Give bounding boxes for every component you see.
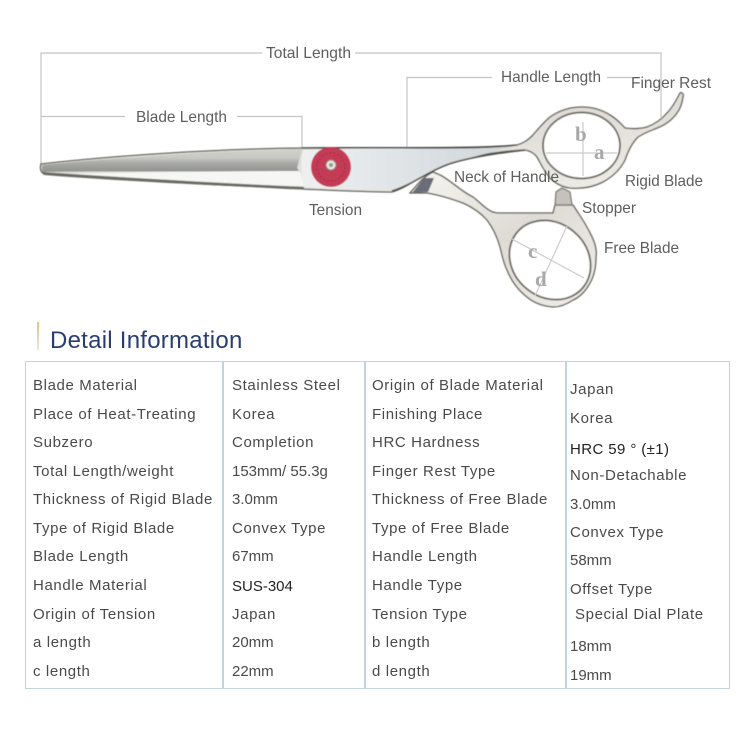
column: attribute names 1: Total Length/weight <box>33 462 174 480</box>
column: attribute values 1: 3.0mm <box>232 491 278 508</box>
column: attribute names 2: Origin of Blade Material <box>372 377 544 394</box>
label: finger rest: Finger Rest <box>631 75 712 92</box>
scissors <box>40 93 683 316</box>
column: attribute values 2: 58mm <box>570 552 612 569</box>
column: attribute names 1: Subzero <box>33 434 93 451</box>
column: attribute values 1: Korea <box>232 406 275 422</box>
label: stopper: Stopper <box>582 200 637 217</box>
column: attribute names 1: Thickness of Rigid Blade <box>33 491 213 508</box>
column: attribute values 2 <box>570 381 704 684</box>
column: attribute values 1: Japan <box>232 606 276 622</box>
column: attribute values 2: Offset Type <box>570 581 653 598</box>
ring measurement lines <box>512 122 617 296</box>
label: blade length: Blade Length <box>136 109 227 126</box>
column: attribute names 2 <box>372 377 548 680</box>
column: attribute names 1: Place of Heat-Treating <box>33 406 196 422</box>
column: attribute names 1: Handle Material <box>33 577 147 594</box>
heading: Detail Information: Detail Information <box>50 327 243 354</box>
ring dimension letters: c <box>528 239 537 263</box>
column: attribute values 1 <box>232 377 341 680</box>
column: attribute names 1: c length <box>33 663 90 680</box>
column: attribute names 2: Thickness of Free Blade <box>372 491 548 508</box>
label: total length: Total Length <box>266 45 351 62</box>
column: attribute values 1: SUS-304 <box>232 578 293 595</box>
column: attribute values 1: Convex Type <box>232 520 326 536</box>
column: attribute values 2: 19mm <box>570 667 612 684</box>
column: attribute names 1: Origin of Tension <box>33 606 156 622</box>
spec table frame <box>25 361 730 689</box>
column: attribute values 2: 18mm <box>570 638 612 655</box>
blade grind <box>42 149 302 172</box>
column: attribute values 2: 3.0mm <box>570 496 616 513</box>
column: attribute values 2: Special Dial Plate <box>575 606 704 623</box>
column: attribute names 1: Blade Material <box>33 377 138 394</box>
tension dial <box>311 147 351 187</box>
label: free blade: Free Blade <box>604 240 679 257</box>
ring dimension letters: d <box>535 267 547 291</box>
rigid blade and handle <box>40 93 683 192</box>
column: attribute values 2: Non-Detachable <box>570 467 687 484</box>
column: attribute names 1: Blade Length <box>33 548 129 565</box>
column: attribute names 2: Handle Type <box>372 577 463 594</box>
column: attribute values 1: 20mm <box>232 634 274 651</box>
column: attribute names 1: Type of Rigid Blade <box>33 520 175 536</box>
column: attribute values 1: Stainless Steel <box>232 377 341 394</box>
column: attribute values 1: 153mm/ 55.3g <box>232 462 328 480</box>
label: handle length: Handle Length <box>501 69 601 86</box>
column: attribute names 2: Handle Length <box>372 548 478 565</box>
stopper <box>555 188 572 205</box>
ring dimension letters: b <box>575 122 587 146</box>
column: attribute names 1 <box>33 377 213 680</box>
labels <box>136 45 712 257</box>
column: attribute values 1: 67mm <box>232 548 274 565</box>
column: attribute names 1: a length <box>33 634 91 651</box>
ring dimension letters: a <box>594 140 605 164</box>
column: attribute values 1: Completion <box>232 434 314 451</box>
column: attribute values 1: 22mm <box>232 663 274 680</box>
column: attribute names 2: HRC Hardness <box>372 434 480 451</box>
label: rigid blade: Rigid Blade <box>625 173 703 190</box>
ring dimension letters <box>528 122 605 291</box>
column: attribute names 2: b length <box>372 634 430 651</box>
heading accent bar <box>37 322 39 350</box>
scissors diagram <box>39 45 712 308</box>
free blade handle and ring <box>410 172 607 316</box>
column: attribute values 2: HRC 59 ° (±1) <box>570 441 669 458</box>
column: attribute values 2: Korea <box>570 410 613 427</box>
label: tension: Tension <box>309 202 362 219</box>
column: attribute names 2: Finishing Place <box>372 406 483 422</box>
label: neck of handle: Neck of Handle <box>454 169 559 186</box>
column: attribute names 2: Finger Rest Type <box>372 462 496 480</box>
column: attribute names 2: d length <box>372 663 430 680</box>
pivot plate <box>301 146 515 190</box>
column: attribute values 2: Convex Type <box>570 524 664 541</box>
column: attribute names 2: Type of Free Blade <box>372 520 510 536</box>
column: attribute names 2: Tension Type <box>372 606 468 622</box>
column: attribute values 2: Japan <box>570 381 614 398</box>
